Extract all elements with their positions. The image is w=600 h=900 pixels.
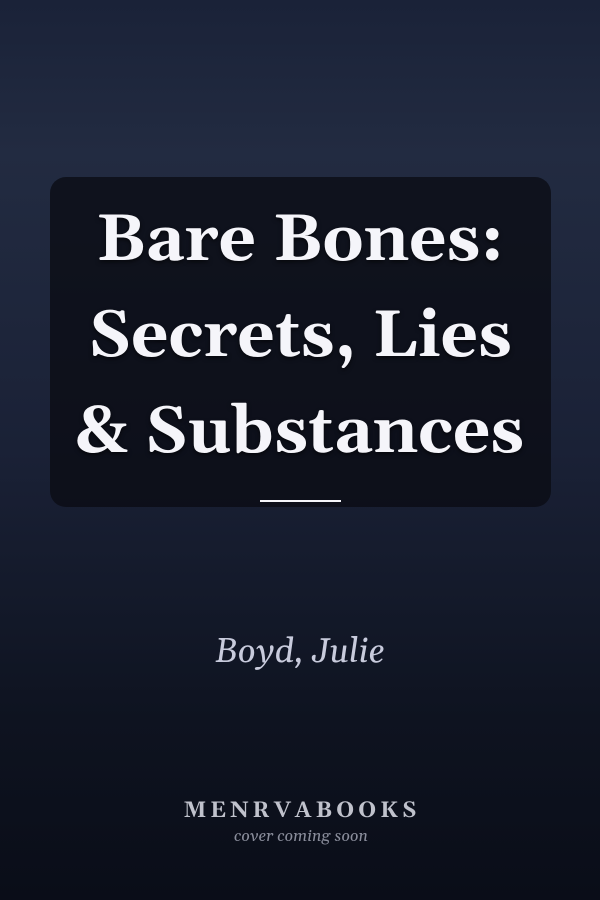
title <box>76 200 524 475</box>
title: & Substances <box>76 392 524 475</box>
cover status note: cover coming soon <box>234 827 368 847</box>
title underline rule <box>260 500 341 502</box>
title: Bare Bones: <box>96 200 504 283</box>
panel: title backing <box>50 177 551 507</box>
title: Secrets, Lies <box>88 296 512 379</box>
publisher name: MENRVABOOKS <box>184 797 420 825</box>
author: Boyd, Julie <box>215 630 385 674</box>
